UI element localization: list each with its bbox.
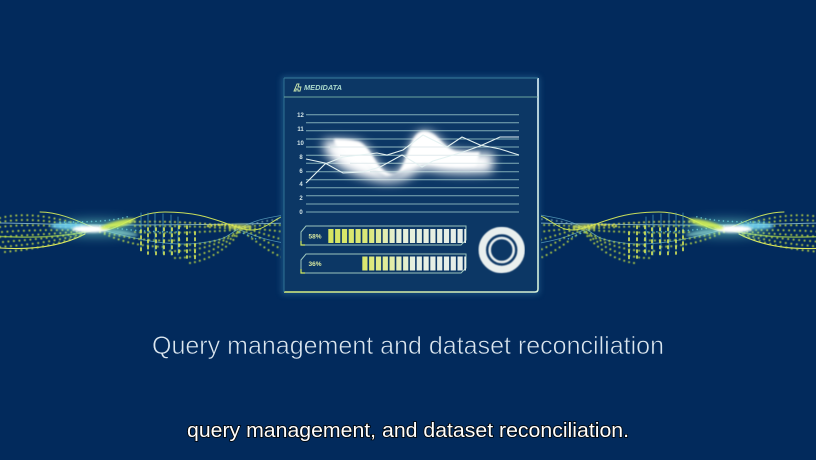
y axis labels: 12 [297,113,304,119]
donut gauge [482,231,521,269]
grid lines over area [330,147,490,172]
progress bar 58%: 58% [308,234,322,240]
grid lines [306,115,519,212]
subtitle caption: query management, and dataset reconciliation. [187,420,629,442]
progress bar 36% [301,254,466,273]
y axis labels: 8 [299,155,303,161]
line chart [297,113,519,216]
line series 2 [306,137,519,173]
progress bar 58% [301,226,466,245]
logo: Medidata: MEDIDATA [304,83,342,92]
header divider [284,96,538,98]
white blurred area [323,131,494,182]
y axis labels: 4 [299,182,303,188]
right data wave [534,212,816,263]
line series 1 [306,135,519,183]
panel: dashboard [281,76,540,295]
left data wave [0,212,290,263]
y axis labels: 11 [297,127,304,133]
y axis labels: 10 [297,141,304,147]
y axis labels: 0 [299,210,303,216]
progress bar 36%: 36% [308,261,322,268]
heading: Query management and dataset reconciliation [152,332,664,360]
y axis labels: 2 [299,196,303,202]
y axis labels: 6 [299,169,303,175]
y axis labels [297,113,304,216]
